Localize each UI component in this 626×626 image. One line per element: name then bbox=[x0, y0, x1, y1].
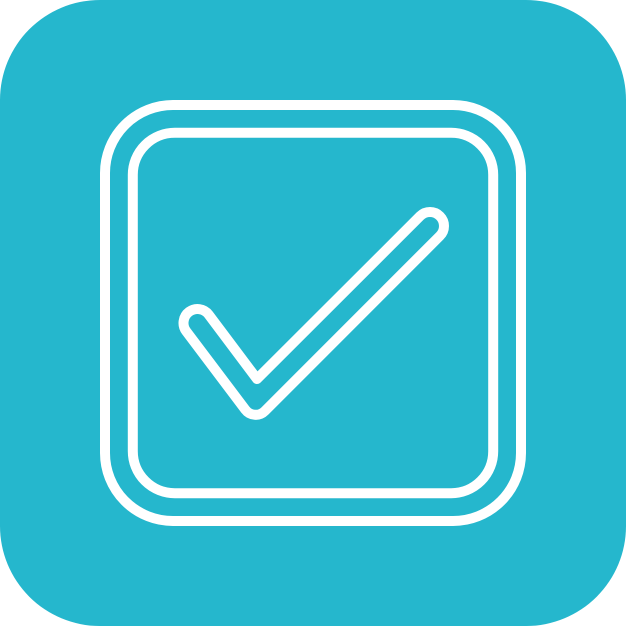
icon: outer rounded square outline bbox=[105, 105, 521, 521]
icon: check mark outline bbox=[184, 212, 444, 415]
icon: inner rounded square outline bbox=[133, 133, 493, 493]
